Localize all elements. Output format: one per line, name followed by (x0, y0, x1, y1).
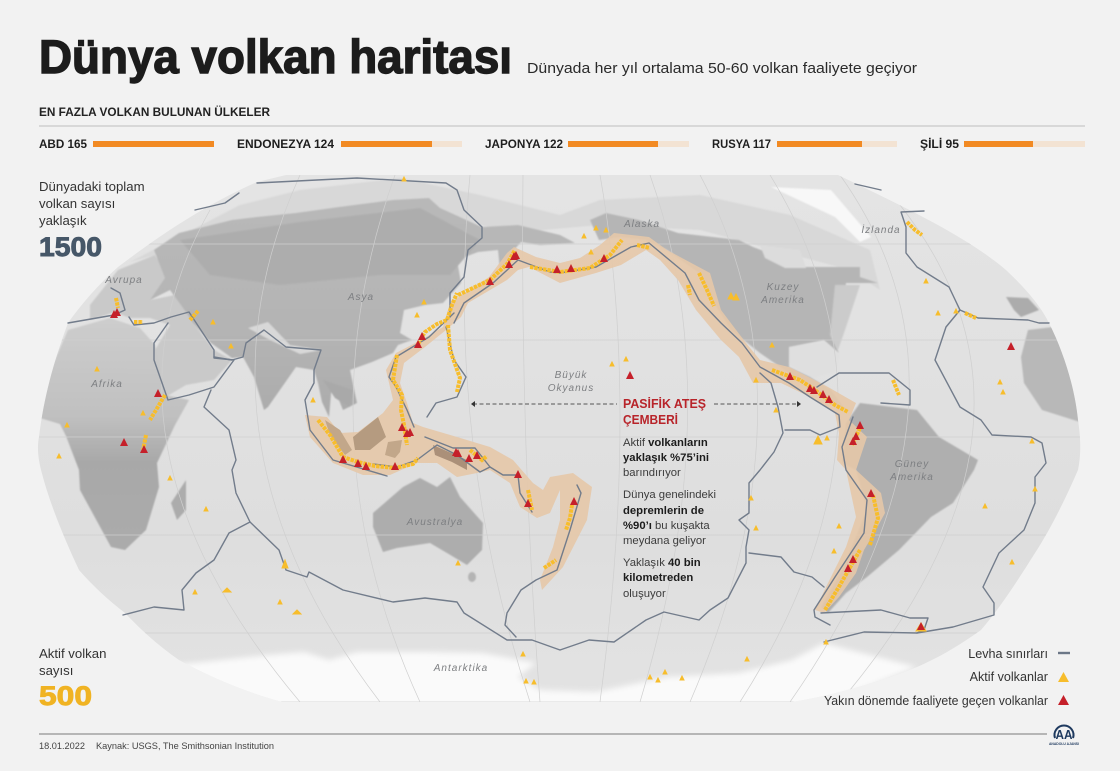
stat: active volcanoes: Aktif volkan (39, 646, 106, 661)
land in belt: Sulawesi (385, 440, 402, 458)
source: Kaynak: USGS, The Smithsonian Institution (96, 741, 274, 751)
land: Caribbean and Mexico Gulf (789, 342, 840, 378)
callout text: earthquake share (623, 489, 716, 547)
callout text: earthquake share: depremlerin de (623, 505, 704, 517)
heading: countries with most volcanoes: EN FAZLA VOLKAN BULUNAN ÜLKELER (39, 106, 271, 119)
land masses (0, 175, 1120, 712)
label: Büyük Okyanus: Büyük (555, 370, 587, 381)
land: South America (821, 403, 978, 613)
legend: active volcanoes: Aktif volkanlar (970, 670, 1048, 684)
land: Australia (373, 477, 483, 565)
label: Kuzey Amerika: Kuzey (767, 282, 799, 293)
label: Antarktika: Antarktika (433, 663, 488, 674)
bar: Rusya 117 (712, 137, 897, 151)
label: Güney Amerika: Güney (895, 459, 929, 470)
land in belt: Sumatra (325, 420, 352, 455)
bar: Endonezya 124 (237, 137, 462, 151)
active volcano chains (57, 177, 1037, 684)
land in belt: Borneo (353, 417, 386, 450)
land: Indochina (330, 383, 340, 400)
land: Greenland (771, 187, 871, 242)
land: Africa (40, 318, 189, 550)
footer (39, 734, 1047, 751)
label: İzlanda: İzlanda (861, 224, 901, 236)
label: Afrika: Afrika (90, 379, 123, 390)
plate boundaries (68, 178, 1049, 650)
land: Great Lakes and East (830, 285, 860, 350)
callout text: earthquake share: Dünya genelindeki (623, 489, 716, 501)
subtitle: Dünyada her yıl ortalama 50-60 volkan faaliyete geçiyor (527, 60, 917, 77)
land: Madagascar (171, 480, 186, 520)
callout text: length: oluşuyor (623, 588, 666, 600)
callout text: length (623, 557, 701, 600)
land: Antarctica ice (184, 643, 913, 702)
stat: total volcanoes: Dünyadaki toplam (39, 179, 145, 194)
Pacific Ring of Fire belt (305, 233, 885, 613)
callout text: length: Yaklaşık 40 bin (623, 557, 701, 569)
callout: Pacific Ring of Fire: ÇEMBERİ (623, 412, 678, 427)
stat: active volcanoes: 500 (39, 681, 92, 711)
land: arctic shelf (130, 178, 880, 290)
label: Güney Amerika: Amerika (889, 472, 934, 483)
bar: ABD 165: ABD 165 (39, 137, 87, 151)
date: 18.01.2022 (39, 741, 85, 751)
land: Asia (150, 198, 575, 417)
label: Kuzey Amerika: Amerika (760, 295, 805, 306)
land: Himalaya highlight (248, 322, 322, 354)
callout text: length: kilometreden (623, 572, 693, 584)
land: Tasmania (468, 572, 476, 582)
land: West Africa (1021, 327, 1080, 422)
legend (824, 647, 1070, 708)
legend: plate boundaries: Levha sınırları (968, 647, 1048, 661)
bar: ABD 165 (39, 137, 214, 151)
bar: Rusya 117: RUSYA 117 (712, 137, 771, 151)
world map (0, 175, 1120, 712)
icon: Anadolu Ajansı logo: AA (1056, 727, 1073, 742)
bar chart: countries (39, 136, 1085, 151)
graticule lines (0, 175, 1120, 702)
land: Hudson Bay (762, 250, 806, 268)
stat: active volcanoes: sayısı (39, 663, 73, 678)
icon: Anadolu Ajansı logo (1049, 725, 1079, 746)
callout heading: PASİFİK ATEŞ (623, 396, 706, 411)
callout text: earthquake share: %90’ı bu kuşakta (623, 520, 710, 532)
callout: Pacific Ring of Fire (471, 396, 801, 600)
bar: Japonya 122 (485, 137, 689, 151)
stat: total volcanoes (39, 179, 145, 262)
label: Büyük Okyanus: Okyanus (548, 383, 594, 394)
callout text: volcano share: Aktif volkanların (623, 437, 708, 449)
title: Dünya volkan haritası (39, 30, 512, 83)
arrow: span of the ring (471, 401, 801, 407)
legend: recently active volcanoes: Yakın dönemde faaliyete geçen volkanlar (824, 694, 1048, 708)
icon: Anadolu Ajansı logo: ANADOLU AJANSI (1049, 741, 1079, 746)
stat: total volcanoes: yaklaşık (39, 213, 87, 228)
land in belt: New Guinea (433, 445, 467, 470)
label: Alaska: Alaska (623, 219, 660, 230)
callout text: earthquake share: meydana geliyor (623, 535, 706, 547)
land: Europe and Middle East (90, 255, 232, 398)
stat: total volcanoes: 1500 (39, 232, 102, 262)
label: Avustralya: Avustralya (406, 517, 463, 528)
label: Asya: Asya (347, 292, 374, 303)
label: Avrupa: Avrupa (104, 275, 143, 286)
bar: Şili 95 (920, 136, 1085, 151)
land: Siberia shading (180, 208, 480, 285)
bar: Endonezya 124: ENDONEZYA 124 (237, 137, 334, 151)
stat: active volcanoes (39, 646, 106, 711)
map labels (90, 219, 934, 674)
land: North America (590, 212, 876, 383)
stat: total volcanoes: volkan sayısı (39, 196, 115, 211)
recent eruption volcanoes (110, 251, 1015, 630)
callout text: volcano share: barındırıyor (623, 467, 681, 479)
bar: Şili 95: ŞİLİ 95 (920, 136, 959, 151)
callout text: volcano share: yaklaşık %75’ini (623, 452, 709, 464)
bar: Japonya 122: JAPONYA 122 (485, 137, 563, 151)
land: Iberia (1006, 297, 1039, 317)
ocean (38, 175, 1080, 702)
callout text: volcano share (623, 437, 709, 479)
